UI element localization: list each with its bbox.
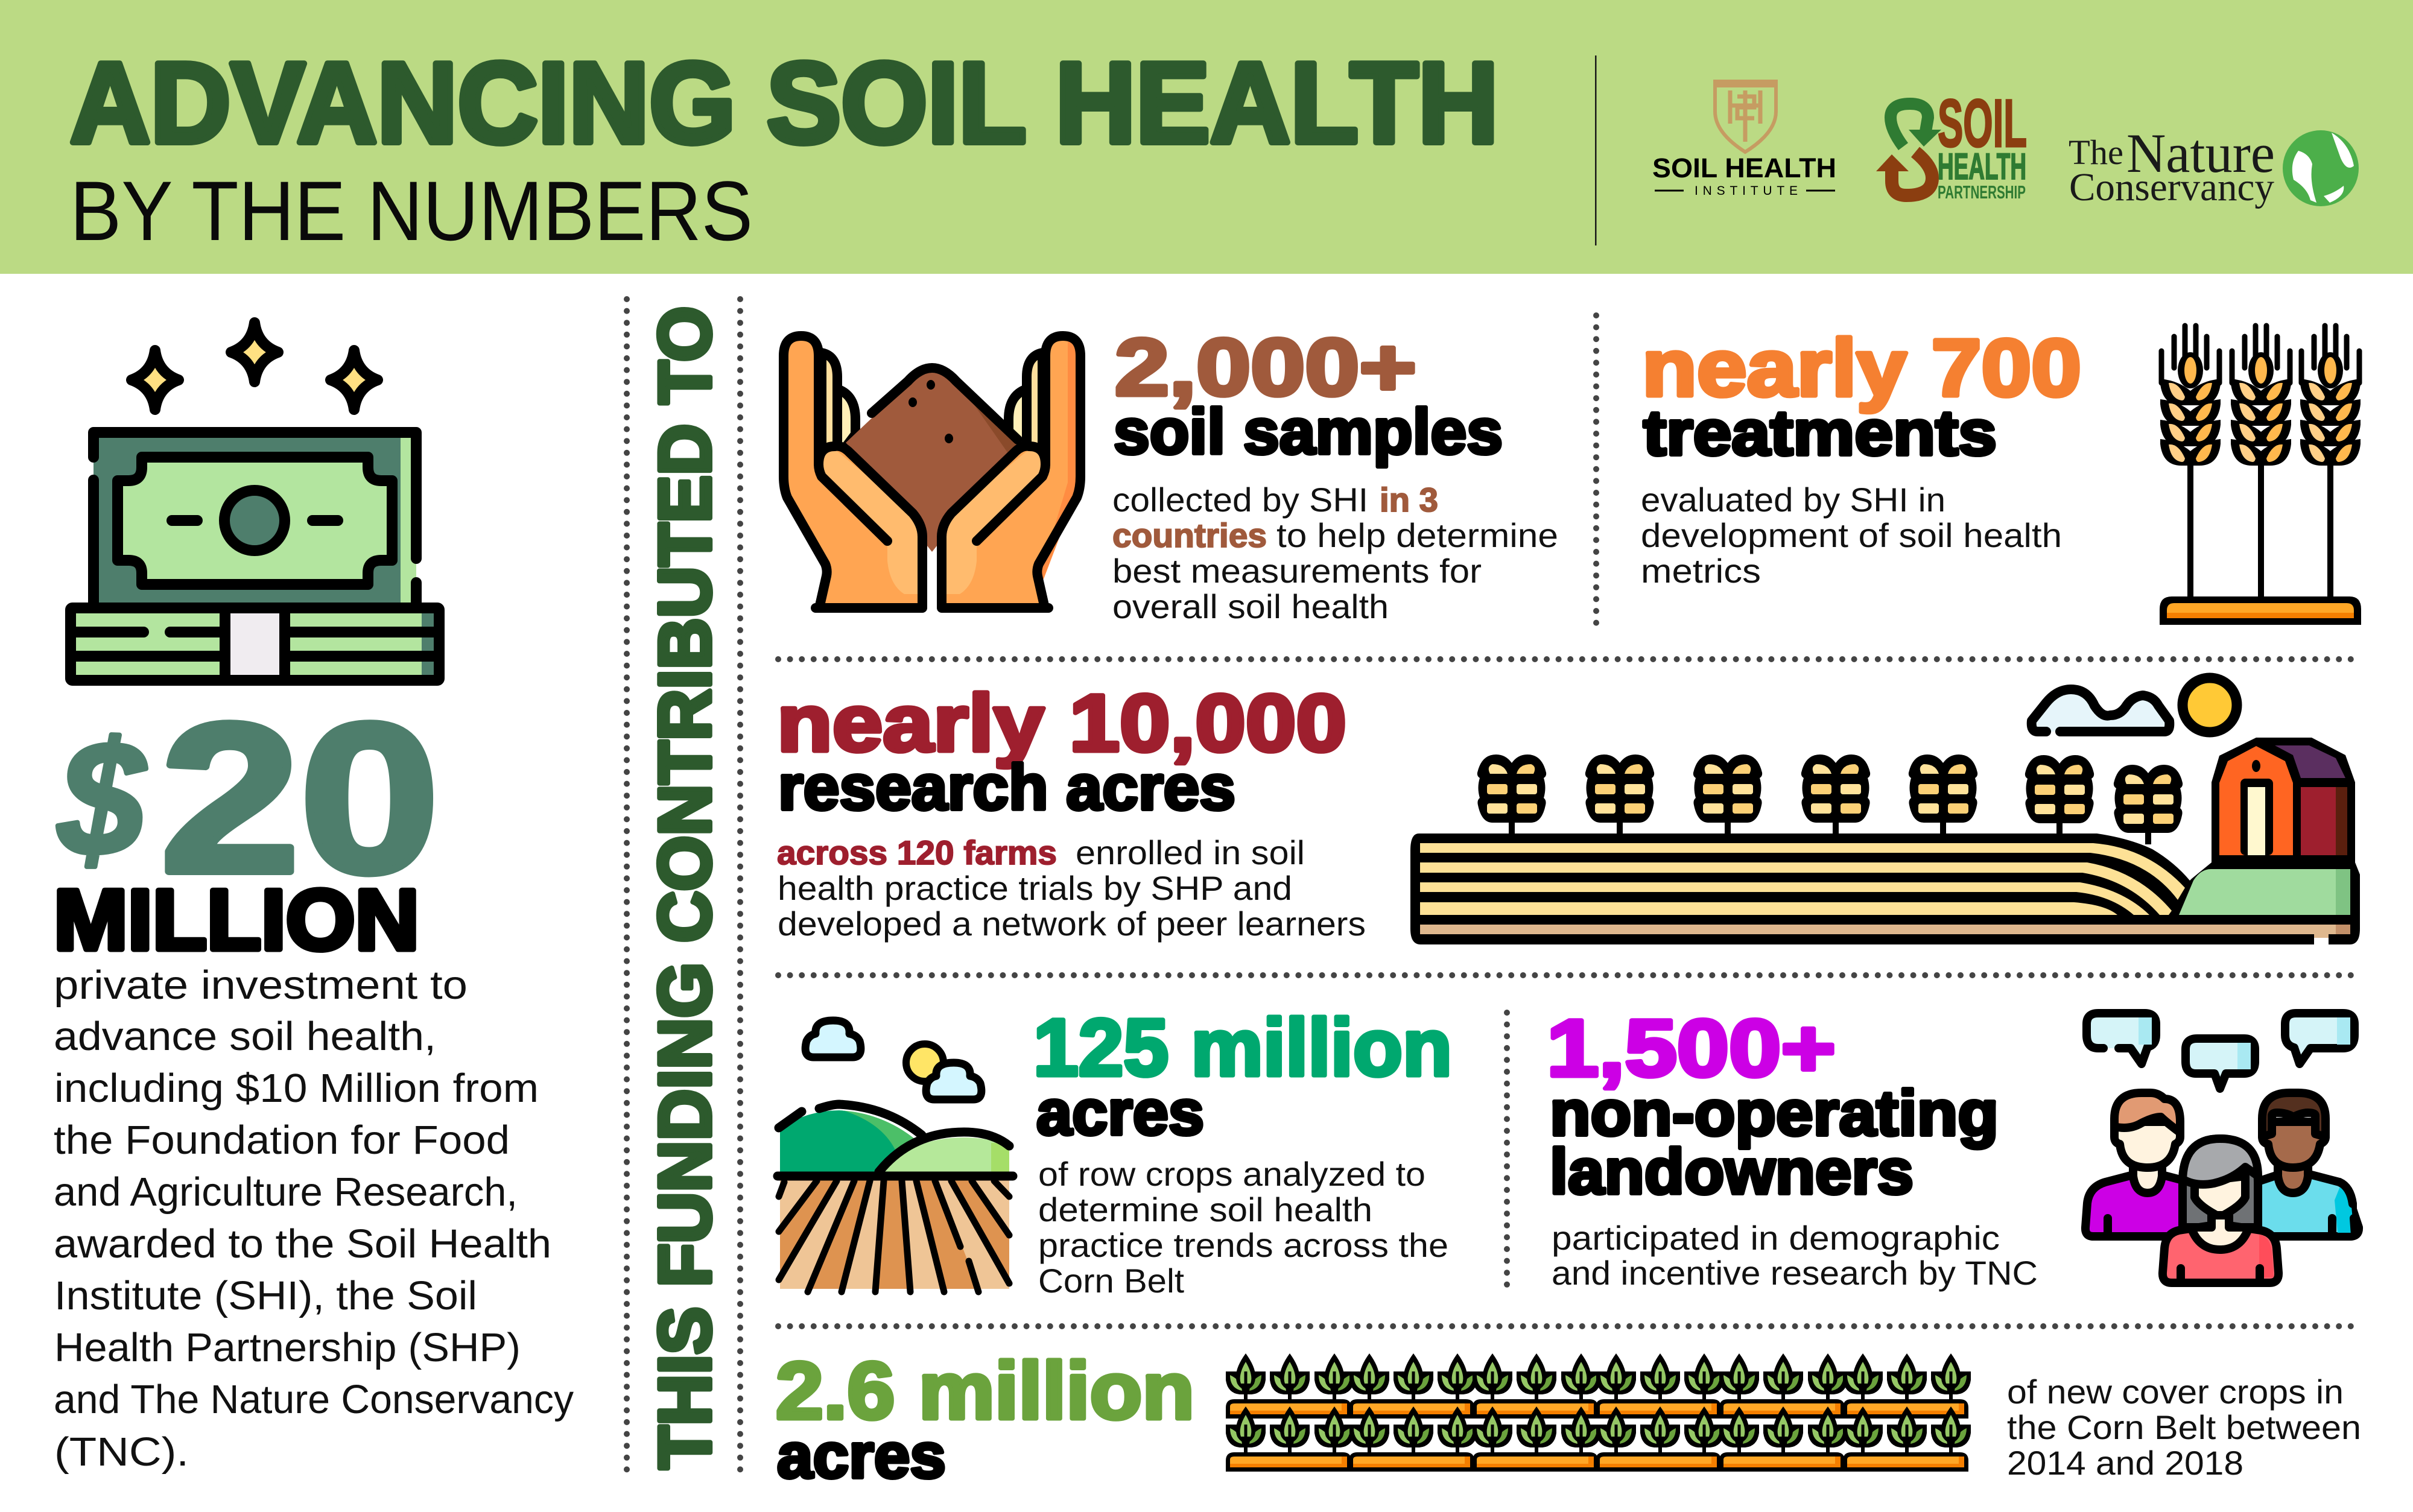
stat: 2.6 million acres: acres xyxy=(777,1420,946,1491)
text block: row crops description: practice trends across the xyxy=(1038,1226,1448,1264)
text block: treatments description xyxy=(1641,481,2062,590)
text block: landowners description: and incentive research by TNC xyxy=(1552,1254,2038,1292)
text block: investment description: Health Partnership (SHP) xyxy=(54,1325,521,1370)
stat: 125 million acres xyxy=(1033,1003,1452,1148)
text block: investment description: and The Nature Conservancy xyxy=(54,1377,574,1422)
logo: The Nature Conservancy: The xyxy=(2069,133,2123,172)
stat: 2,000+ soil samples: soil samples xyxy=(1114,396,1503,467)
logo: Soil Health Partnership: HEALTH xyxy=(1938,146,2026,187)
stat: 2,000+ soil samples: 2,000+ xyxy=(1115,323,1416,413)
text block: soil samples description: countries xyxy=(1112,516,1267,554)
text block: investment description: the Foundation for Food xyxy=(54,1118,510,1163)
stat: $20 xyxy=(56,679,439,917)
icon: hands holding soil xyxy=(784,336,1080,608)
logo: The Nature Conservancy xyxy=(2069,122,2359,209)
text block: investment description xyxy=(54,963,574,1475)
text block: landowners description xyxy=(1552,1219,2038,1292)
text block: investment description: private investment to xyxy=(54,963,468,1008)
text block: investment description: advance soil health, xyxy=(54,1014,436,1059)
text block: research acres description xyxy=(777,833,1366,943)
stat: nearly 10,000 research acres: nearly 10,000 xyxy=(777,679,1346,768)
icon: sparkles xyxy=(132,323,378,410)
text block: landowners description: participated in demographic xyxy=(1552,1219,2000,1257)
text block: investment description: and Agriculture Research, xyxy=(54,1169,518,1215)
text block: cover crops description xyxy=(2007,1373,2361,1482)
stat label: MILLION: MILLION xyxy=(54,872,419,968)
header band xyxy=(0,0,2413,274)
stat: 1,500+ non-operating landowners xyxy=(1547,1004,1999,1207)
text block: row crops description: Corn Belt xyxy=(1038,1262,1184,1300)
logo: The Nature Conservancy: Conservancy xyxy=(2069,165,2274,209)
logo: Soil Health Partnership: SOIL xyxy=(1938,86,2027,161)
header divider xyxy=(1595,55,1596,245)
text block: row crops description: determine soil health xyxy=(1038,1191,1372,1229)
logo: Soil Health Institute xyxy=(1652,80,1836,198)
icon: rows of cover crops xyxy=(1226,1353,1971,1472)
stat: 1,500+ non-operating landowners: landowners xyxy=(1550,1136,1914,1207)
text block: research acres description: health practice trials by SHP and xyxy=(778,869,1292,907)
vertical heading: THIS FUNDING CONTRIBUTED TO xyxy=(644,306,726,1469)
text block: soil samples description: collected by SHI xyxy=(1112,481,1368,519)
stat: nearly 700 treatments: treatments xyxy=(1643,397,1997,469)
text block: cover crops description: of new cover crops in xyxy=(2007,1373,2344,1411)
subtitle: BY THE NUMBERS xyxy=(70,163,753,258)
stat: 1,500+ non-operating landowners: 1,500+ xyxy=(1547,1004,1836,1093)
text block: investment description: Institute (SHI), the Soil xyxy=(54,1273,477,1318)
stat: 2.6 million acres xyxy=(776,1346,1194,1491)
logo: Soil Health Partnership: PARTNERSHIP xyxy=(1938,182,2026,203)
logo: The Nature Conservancy: Nature xyxy=(2126,122,2275,184)
stat: 1,500+ non-operating landowners: non-operating xyxy=(1550,1078,1999,1149)
text block: investment description: (TNC). xyxy=(54,1429,189,1475)
logo: Soil Health Institute: SOIL HEALTH xyxy=(1652,153,1836,183)
text block: treatments description: development of soil health xyxy=(1641,516,2062,554)
text block: soil samples description: to help determine xyxy=(1276,516,1558,554)
icon: wheat stalks xyxy=(2160,326,2361,625)
text block: row crops description: of row crops analyzed to xyxy=(1038,1155,1425,1193)
text block: soil samples description: in 3 xyxy=(1380,481,1438,519)
text block: treatments description: metrics xyxy=(1641,552,1761,590)
stat: nearly 10,000 research acres: research acres xyxy=(778,752,1235,823)
text block: soil samples description: overall soil health xyxy=(1112,587,1389,625)
text block: treatments description: evaluated by SHI in xyxy=(1641,481,1945,519)
text block: investment description: including $10 Million from xyxy=(54,1066,539,1111)
text block: investment description: awarded to the Soil Health xyxy=(54,1221,551,1267)
text block: soil samples description: best measurements for xyxy=(1112,552,1482,590)
stat: 2,000+ soil samples xyxy=(1114,323,1503,467)
logo: Soil Health Partnership xyxy=(1876,86,2027,203)
stat: nearly 700 treatments xyxy=(1642,323,2081,469)
logo: Soil Health Institute: INSTITUTE xyxy=(1695,184,1798,198)
stat: nearly 10,000 research acres xyxy=(777,679,1346,823)
icon: people with speech bubbles xyxy=(2085,1013,2359,1283)
text block: research acres description: across 120 farms xyxy=(777,833,1057,871)
text block: soil samples description xyxy=(1112,481,1558,625)
text block: research acres description: developed a network of peer learners xyxy=(778,905,1366,943)
icon: farm with barn xyxy=(1410,678,2360,944)
stat: 2.6 million acres: 2.6 million xyxy=(776,1346,1194,1436)
icon: money stack xyxy=(71,432,439,680)
text block: row crops description xyxy=(1038,1155,1448,1300)
text block: research acres description: enrolled in soil xyxy=(1076,833,1305,871)
stat: $20: 20 xyxy=(160,679,439,917)
stat: $20: $ xyxy=(56,708,148,889)
stat: 125 million acres: 125 million xyxy=(1033,1003,1452,1093)
text block: cover crops description: the Corn Belt between xyxy=(2007,1408,2361,1446)
icon: hills and plowed field xyxy=(778,1020,1013,1292)
text block: cover crops description: 2014 and 2018 xyxy=(2007,1444,2243,1482)
stat: nearly 700 treatments: nearly 700 xyxy=(1642,323,2081,413)
stat: 125 million acres: acres xyxy=(1036,1077,1204,1148)
title: ADVANCING SOIL HEALTH xyxy=(70,39,1498,167)
